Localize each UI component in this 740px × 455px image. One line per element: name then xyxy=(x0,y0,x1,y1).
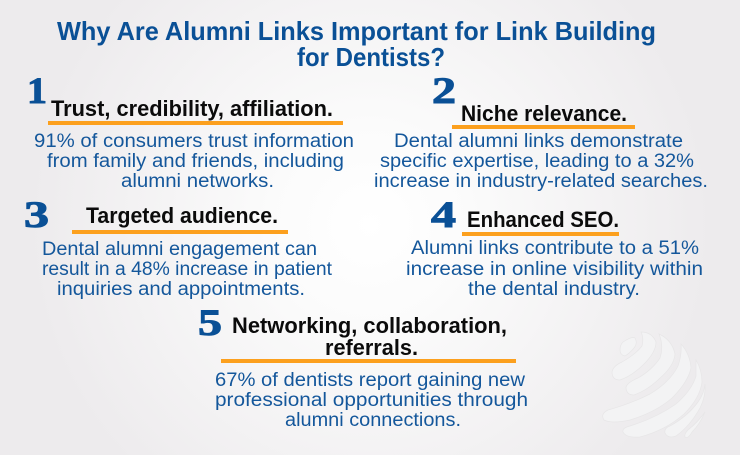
number 2: 2 xyxy=(432,71,456,112)
number 1: 1 xyxy=(27,71,47,112)
heading: seo: Enhanced SEO. xyxy=(467,207,619,232)
heading: trust: Trust, credibility, affiliation. xyxy=(51,96,333,121)
panel: item 1 trust xyxy=(27,71,354,192)
panel: item 4 seo xyxy=(406,195,703,300)
heading: networking: Networking, collaboration, xyxy=(232,313,507,338)
text: seo body: the dental industry. xyxy=(468,279,640,300)
underline: niche xyxy=(452,125,635,129)
text: networking body xyxy=(215,370,528,431)
text: niche body xyxy=(374,131,708,192)
heading: niche: Niche relevance. xyxy=(461,101,627,126)
number 4: 4 xyxy=(431,195,456,236)
heading: networking xyxy=(232,313,507,360)
text: trust body: 91% of consumers trust information xyxy=(34,131,354,152)
panel: item 5 networking xyxy=(198,303,528,431)
text: audience body: Dental alumni engagement can xyxy=(42,239,317,260)
title: for Dentists? xyxy=(297,42,445,72)
text: niche body: Dental alumni links demonstrate xyxy=(394,131,683,152)
text: trust body xyxy=(34,131,354,192)
icon: decorative globe xyxy=(603,332,705,437)
text: seo body xyxy=(406,238,703,300)
underline: networking xyxy=(221,359,516,363)
heading: audience: Targeted audience. xyxy=(86,203,278,228)
number 3: 3 xyxy=(24,195,49,236)
underline: audience xyxy=(72,230,288,234)
panel: item 2 niche xyxy=(374,71,708,192)
text: audience body: inquiries and appointments. xyxy=(57,279,305,300)
number 5: 5 xyxy=(198,303,222,344)
text: niche body: specific expertise, leading to a 32% xyxy=(380,151,694,172)
text: seo body: increase in online visibility within xyxy=(406,259,703,280)
panel: item 3 audience xyxy=(24,195,333,300)
text: trust body: alumni networks. xyxy=(121,171,274,192)
title: Why Are Alumni Links Important for Link Building xyxy=(57,16,656,46)
text: networking body: 67% of dentists report gaining new xyxy=(215,370,525,391)
text: niche body: increase in industry-related searches. xyxy=(374,171,708,192)
text: networking body: professional opportunities through xyxy=(215,390,528,411)
text: trust body: from family and friends, including xyxy=(47,151,344,172)
heading: networking: referrals. xyxy=(325,335,418,360)
text: seo body: Alumni links contribute to a 51% xyxy=(411,238,699,259)
underline: seo xyxy=(462,232,619,236)
title xyxy=(57,16,656,72)
underline: trust xyxy=(48,121,343,125)
text: audience body xyxy=(42,239,333,300)
text: audience body: result in a 48% increase in patient xyxy=(42,259,333,280)
text: networking body: alumni connections. xyxy=(285,410,461,431)
